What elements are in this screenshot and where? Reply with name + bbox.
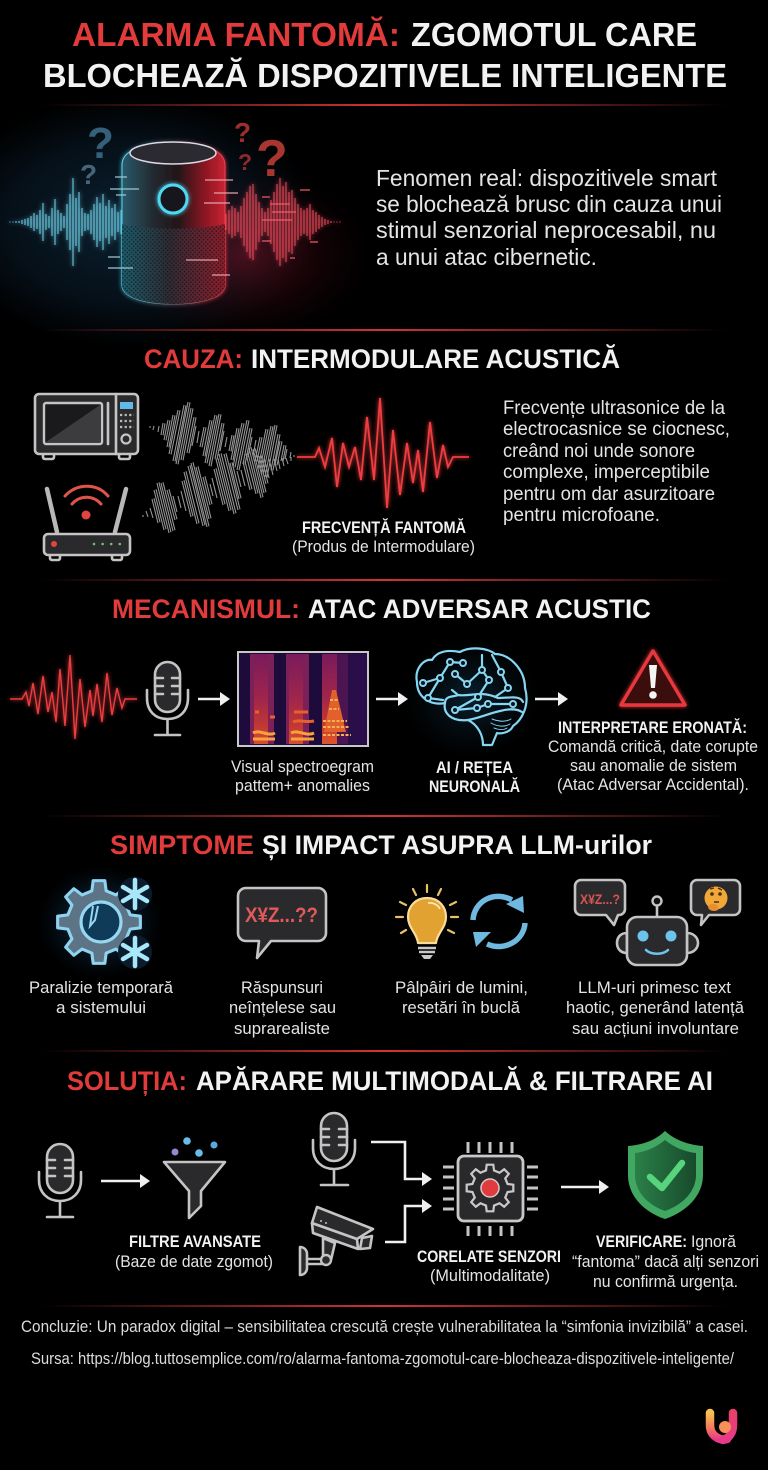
text: cauza description: complexe, imperceptibile: [503, 461, 710, 483]
icon: microphone: [147, 662, 188, 735]
label: spectrogram: [231, 758, 374, 795]
heading: simptome: SIMPTOME: [110, 830, 254, 860]
text: cauza description: pentru microfoane.: [503, 504, 660, 526]
label: wrong interpretation: (Atac Adversar Accidental).: [557, 776, 749, 794]
label: verification: VERIFICARE:: [596, 1232, 687, 1251]
glitch marks: [262, 190, 318, 258]
icon: filter funnel: [164, 1137, 225, 1218]
icon: wifi router: [44, 486, 130, 560]
hero text: stimul senzorial neprocesabil, nu: [376, 217, 716, 243]
title: ZGOMOTUL CARE: [411, 17, 697, 54]
red phantom waveform: [297, 398, 469, 508]
hero text: a unui atac cibernetic.: [376, 244, 597, 270]
icon: speech bubble with garbled text: [238, 888, 326, 958]
title: [43, 16, 727, 95]
symptom label: surreal answers: Răspunsuri: [241, 978, 323, 997]
label: verification: “fantoma” dacă alți senzori: [572, 1252, 759, 1271]
symptom label: surreal answers: [229, 978, 336, 1038]
symptom label: system freeze: Paralizie temporară: [29, 978, 174, 997]
arrow: [101, 1174, 150, 1188]
hero text: [376, 165, 722, 270]
icon: green shield: [628, 1131, 703, 1219]
arrow: [376, 692, 408, 706]
label: neural network: AI / REȚEA: [436, 759, 513, 777]
heading: cauza: INTERMODULARE ACUSTICĂ: [251, 344, 620, 374]
label: advanced filters: [115, 1232, 273, 1271]
label: frecvență fantomă: [292, 518, 475, 556]
arrow: [561, 1180, 609, 1194]
symptom label: LLM chaos: sau acțiuni involuntare: [572, 1019, 739, 1038]
text: cauza description: creând noi unde sonore: [503, 440, 695, 462]
red sound wave: [226, 178, 340, 266]
title: BLOCHEAZĂ DISPOZITIVELE INTELIGENTE: [43, 57, 727, 95]
icon: chatbot with speech bubbles: [575, 880, 740, 965]
heading: mecanismul: MECANISMUL:: [112, 594, 300, 624]
arrow: camera to chip: [385, 1199, 432, 1242]
label: advanced filters: FILTRE AVANSATE: [129, 1232, 261, 1251]
speaker body: [108, 142, 238, 304]
heading: mecanismul: ATAC ADVERSAR ACUSTIC: [308, 594, 651, 624]
label: wrong interpretation: [548, 718, 758, 794]
heading: simptome: ȘI IMPACT ASUPRA LLM-urilor: [262, 830, 652, 860]
arrow: microphone to chip: [371, 1142, 432, 1186]
symptom label: flickering lights: resetări în buclă: [402, 998, 521, 1017]
symptom label: system freeze: a sistemului: [56, 998, 146, 1017]
logo: [710, 1413, 733, 1440]
question marks: ?: [80, 159, 97, 190]
symptom label: surreal answers: neînțelese sau: [229, 998, 336, 1017]
icon: brain neural network: [403, 638, 539, 758]
icon: microwave: [35, 394, 138, 459]
label: sensor correlation: (Multimodalitate): [430, 1266, 550, 1285]
symptom label: LLM chaos: LLM-uri primesc text: [578, 978, 731, 997]
symptom label: flickering lights: Pâlpâiri de lumini,: [395, 978, 528, 997]
symptom label: system freeze: [29, 978, 174, 1017]
label: wrong interpretation: sau anomalie de sistem: [570, 757, 737, 775]
question marks: [80, 117, 288, 190]
label: frecvență fantomă: FRECVENȚĂ FANTOMĂ: [302, 518, 466, 537]
label: wrong interpretation: Comandă critică, date corupte: [548, 738, 758, 756]
icon: reset loop arrows: [473, 896, 525, 947]
hero text: Fenomen real: dispozitivele smart: [376, 165, 718, 191]
text: cauza description: electrocasnice se ciocnesc,: [503, 418, 730, 440]
blue sound wave: [10, 178, 121, 266]
symptom label: LLM chaos: [566, 978, 745, 1038]
icon: sensor chip: [443, 1142, 538, 1236]
heading: mecanismul: [112, 594, 651, 624]
arrow: [535, 692, 568, 706]
hero text: se blochează brusc din cauza unui: [376, 191, 722, 217]
heading: cauza: CAUZA:: [144, 344, 243, 374]
label: advanced filters: (Baze de date zgomot): [115, 1252, 273, 1271]
panel: hero speaker illustration: [0, 97, 370, 347]
label: verification: Ignoră: [691, 1232, 737, 1251]
text: cauza description: Frecvențe ultrasonice de la: [503, 397, 725, 419]
label: verification: nu confirmă urgența.: [593, 1272, 738, 1291]
icon: chatbot with speech bubbles: X¥Z...?: [580, 891, 620, 907]
label: spectrogram: pattem+ anomalies: [235, 777, 370, 795]
label: frecvență fantomă: (Produs de Intermodulare): [292, 538, 475, 556]
icon: frozen gear: [38, 866, 162, 978]
icon: microphone: [39, 1144, 81, 1217]
label: sensor correlation: CORELATE SENZORI: [417, 1247, 561, 1266]
question marks: ?: [238, 149, 252, 175]
symptom label: flickering lights: [395, 978, 528, 1017]
interfering grey waves: [143, 402, 294, 533]
symptom label: surreal answers: suprarealiste: [234, 1019, 330, 1038]
icon: warning triangle: [621, 651, 685, 705]
heading: soluția: SOLUȚIA:: [67, 1066, 187, 1096]
arrow: [198, 692, 230, 706]
label: neural network: [429, 759, 520, 796]
label: spectrogram: Visual spectroegram: [231, 758, 374, 776]
icon: flickering bulb: [396, 885, 458, 959]
label: sensor correlation: [417, 1247, 561, 1285]
red input waveform: [10, 655, 137, 739]
question marks: ?: [87, 119, 114, 168]
question marks: ?: [234, 117, 251, 148]
label: verification: [572, 1232, 759, 1291]
text: cauza description: pentru om dar asurzitoare: [503, 483, 715, 505]
icon: speech bubble with garbled text: X¥Z...??: [245, 904, 318, 927]
text: cauza description: [503, 397, 730, 526]
heading: soluția: APĂRARE MULTIMODALĂ & FILTRARE AI: [196, 1066, 713, 1096]
title: ALARMA FANTOMĂ:: [72, 16, 400, 54]
spectrogram: [238, 652, 368, 746]
symptom label: LLM chaos: haotic, generând latență: [566, 998, 745, 1017]
icon: microphone: [313, 1113, 355, 1185]
label: neural network: NEURONALĂ: [429, 777, 520, 796]
icon: security camera: [300, 1207, 373, 1275]
question marks: ?: [256, 130, 288, 188]
